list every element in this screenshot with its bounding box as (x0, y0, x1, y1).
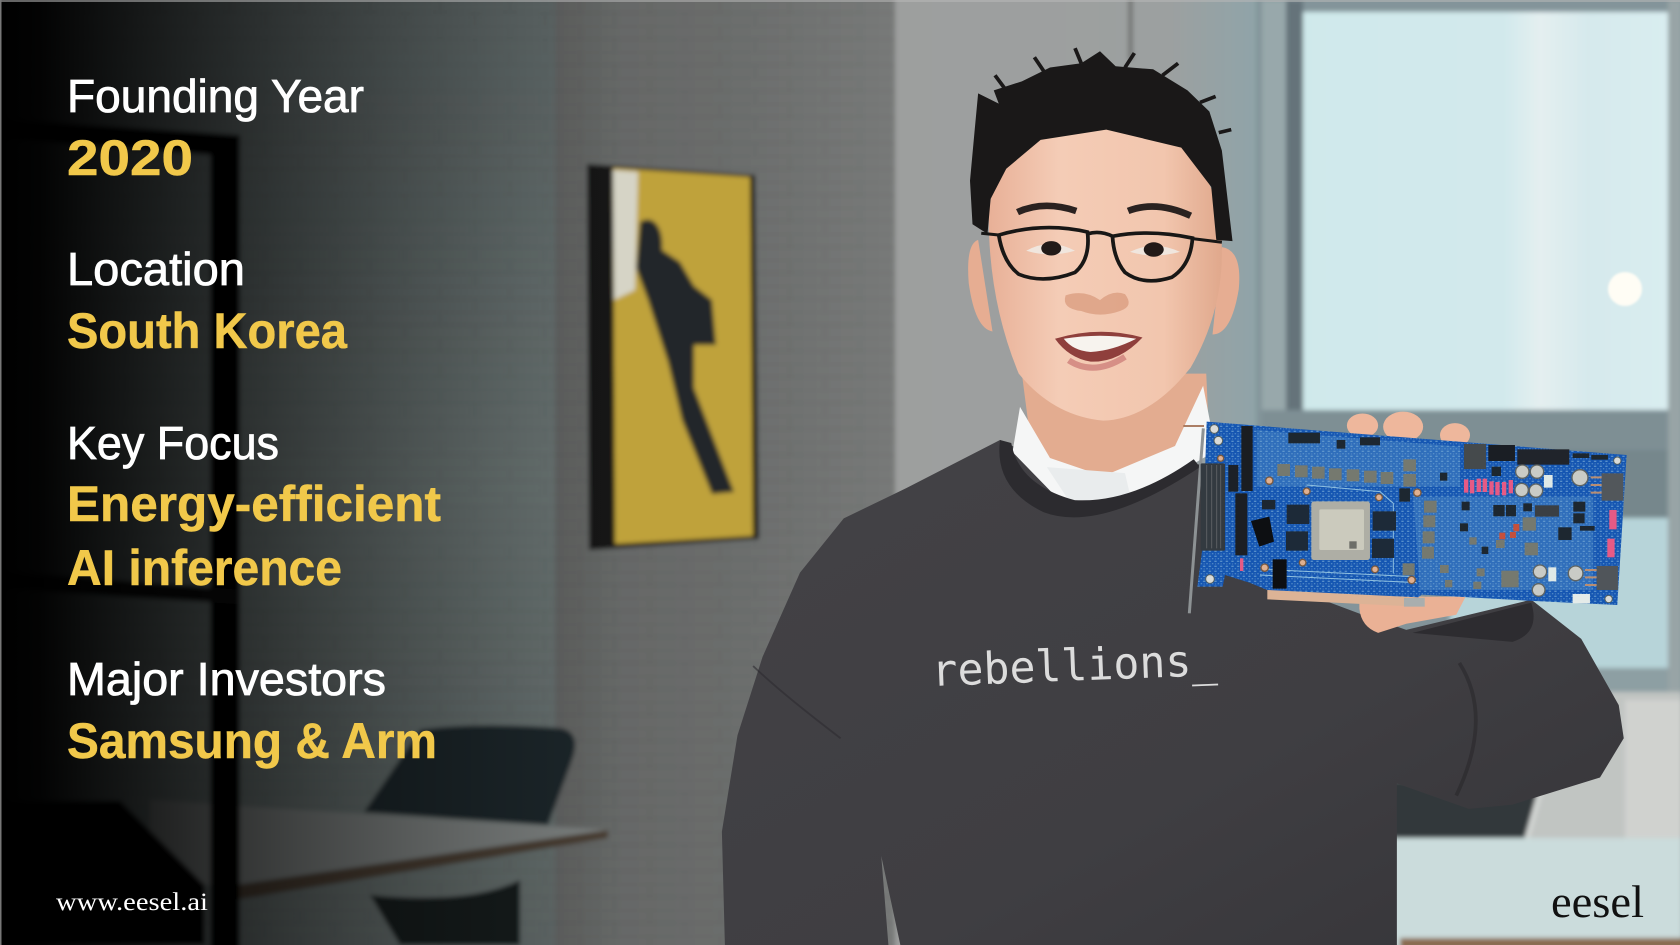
neck (1022, 374, 1209, 506)
bracket (1189, 428, 1203, 613)
left dark gradient overlay (0, 0, 620, 945)
power connectors right (1602, 473, 1623, 501)
light traces (1197, 422, 1627, 605)
ears (968, 240, 992, 331)
pcb (1197, 422, 1627, 605)
window frame (1256, 0, 1680, 945)
sweater (722, 440, 1624, 945)
dark small ICs (1262, 433, 1608, 554)
eyes (1026, 244, 1075, 254)
founding year label: Founding Year (67, 70, 364, 122)
white connectors (1544, 475, 1553, 488)
eyebrows (1018, 206, 1076, 212)
gold connector (1267, 589, 1425, 607)
sweater logo text: rebellions_ (930, 635, 1219, 697)
left door frame (0, 118, 240, 945)
glasses (981, 228, 1222, 281)
location value: South Korea (67, 303, 348, 359)
sweater collar (999, 440, 1200, 517)
person: man in sweater (722, 48, 1624, 945)
top right connectors (1464, 444, 1486, 469)
window light glow (1608, 272, 1642, 306)
key focus label: Key Focus (67, 417, 279, 469)
key focus value, second line: AI inference (67, 540, 342, 596)
fingers behind board (1347, 412, 1470, 447)
founding year value: 2020 (67, 130, 193, 186)
location label: Location (67, 243, 245, 295)
face (989, 129, 1222, 421)
cabinet (1380, 692, 1680, 857)
mouth (1055, 332, 1142, 362)
eesel logo: eesel (1551, 876, 1644, 927)
key focus value: Energy-efficient (67, 476, 441, 532)
framed picture (587, 164, 759, 550)
capacitors (1515, 465, 1588, 596)
edge connector left (1201, 463, 1225, 551)
nose (1065, 293, 1129, 315)
hair (970, 51, 1232, 241)
table right (1390, 838, 1680, 945)
palm under board (1359, 597, 1466, 633)
chair left (364, 725, 575, 825)
circuit board (1183, 422, 1627, 613)
window glass (1303, 12, 1668, 410)
major investors value: Samsung & Arm (67, 713, 437, 769)
stats panel (67, 70, 441, 769)
pin headers (1241, 426, 1253, 491)
voltage regulators (1277, 459, 1538, 589)
table left (150, 800, 608, 885)
major investors label: Major Investors (67, 653, 386, 705)
main processor chip (1311, 501, 1370, 560)
mounting holes (1218, 455, 1421, 584)
website url: www.eesel.ai (56, 889, 208, 916)
black clips (1251, 517, 1274, 547)
memory chips (1286, 505, 1396, 558)
pink resistors (1240, 479, 1617, 571)
chair right (1388, 780, 1542, 842)
shirt collar (1012, 386, 1216, 500)
